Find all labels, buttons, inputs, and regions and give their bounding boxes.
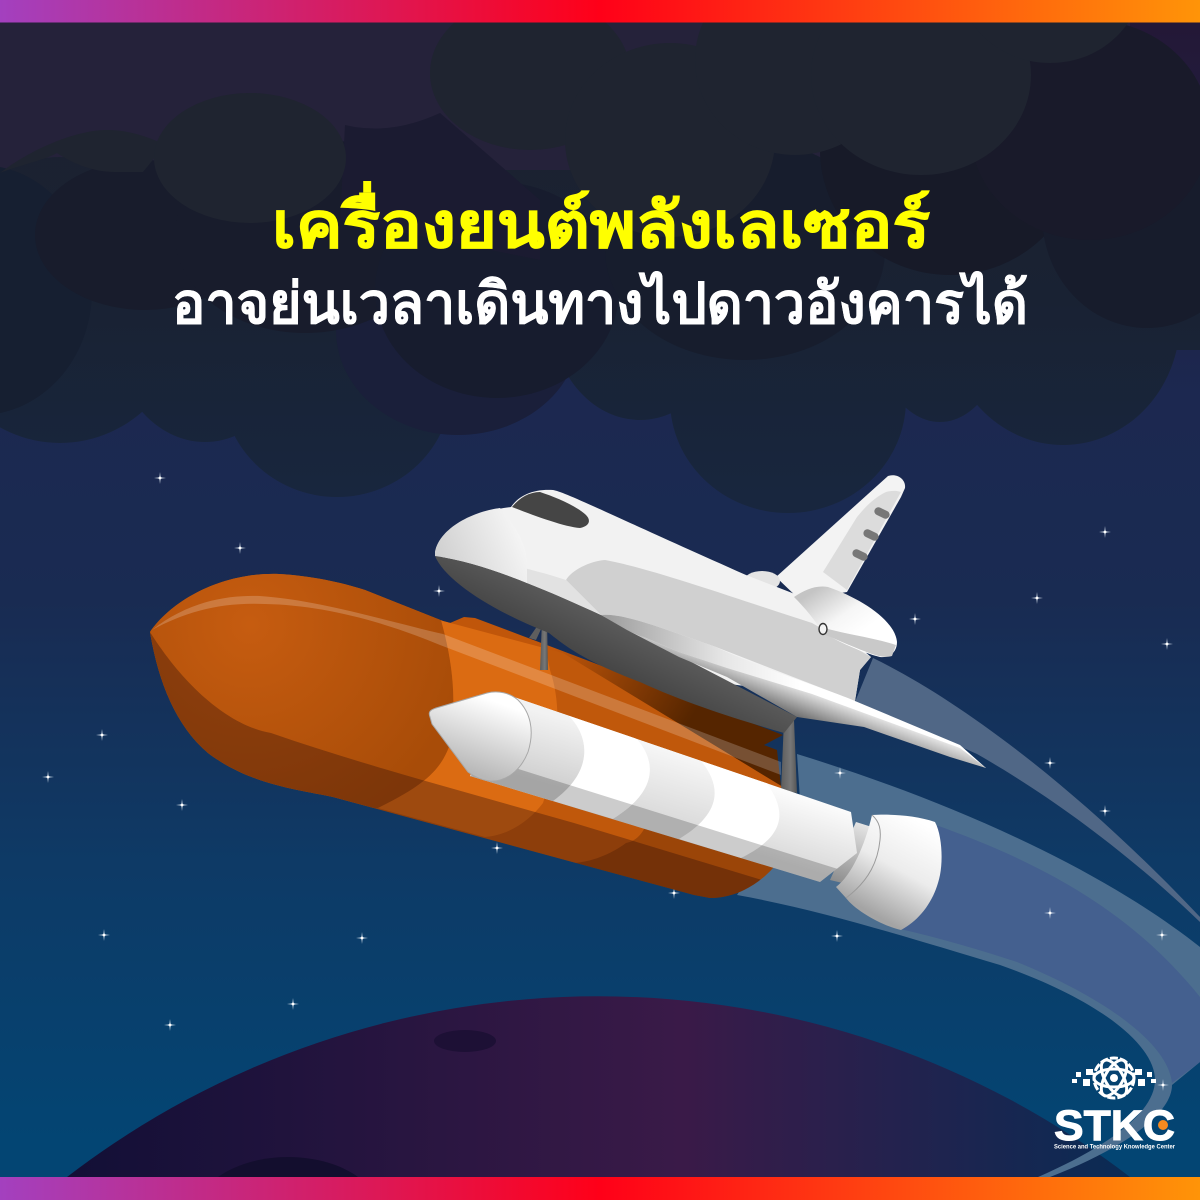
- stars: [42, 472, 1173, 1091]
- logo caption: Science and Technology Knowledge Center: [1054, 1144, 1176, 1150]
- title line 1: เครื่องยนต์พลังเลเซอร์: [272, 181, 930, 261]
- tail vents: [851, 506, 891, 562]
- shuttle trail: [855, 658, 1200, 922]
- lower side stripe: [457, 556, 601, 615]
- STKC logo: [1054, 1056, 1176, 1150]
- OMS pod: [794, 587, 897, 657]
- external fuel tank: [150, 574, 783, 898]
- orbiter shuttle: [435, 475, 986, 768]
- engine bell rim line: [846, 815, 880, 898]
- cockpit window: [512, 492, 589, 528]
- icon: atom: [1094, 1056, 1134, 1100]
- tank body: [150, 574, 782, 898]
- tail fin: [776, 475, 905, 600]
- crater: upper: [434, 1030, 496, 1052]
- struts: [529, 620, 797, 793]
- side panel: [566, 560, 871, 701]
- dark clouds: [0, 0, 1200, 513]
- connector strip: [450, 617, 783, 787]
- nose cone: [429, 692, 531, 781]
- top gradient bar: [0, 0, 1200, 22]
- fuselage: [435, 490, 871, 701]
- icon: pixel squares: [1072, 1069, 1156, 1086]
- pod lower strip: [823, 628, 896, 657]
- bottom gradient bar: [0, 1177, 1200, 1200]
- crater: lower: [218, 1157, 358, 1177]
- logo wordmark: STKC: [1054, 1102, 1175, 1150]
- solid rocket booster: [429, 680, 942, 930]
- nose cap: [435, 508, 527, 583]
- logo dot: [1158, 1120, 1168, 1130]
- booster blue plume: [900, 824, 1200, 1083]
- title line 2: อาจย่นเวลาเดินทางไปดาวอังคารได้: [172, 271, 1028, 336]
- pod nozzle: [819, 624, 827, 634]
- booster light trail: [737, 754, 1200, 1177]
- exhaust trails: [737, 658, 1200, 1177]
- tank highlight stripe: [152, 596, 781, 775]
- neck: [830, 822, 875, 885]
- dorsal bubble: [744, 571, 780, 591]
- engine bell: [836, 815, 942, 930]
- booster body: [470, 697, 857, 882]
- wing: [601, 615, 986, 768]
- planet: [67, 996, 1130, 1177]
- belly: [435, 556, 797, 733]
- title: [172, 181, 1028, 336]
